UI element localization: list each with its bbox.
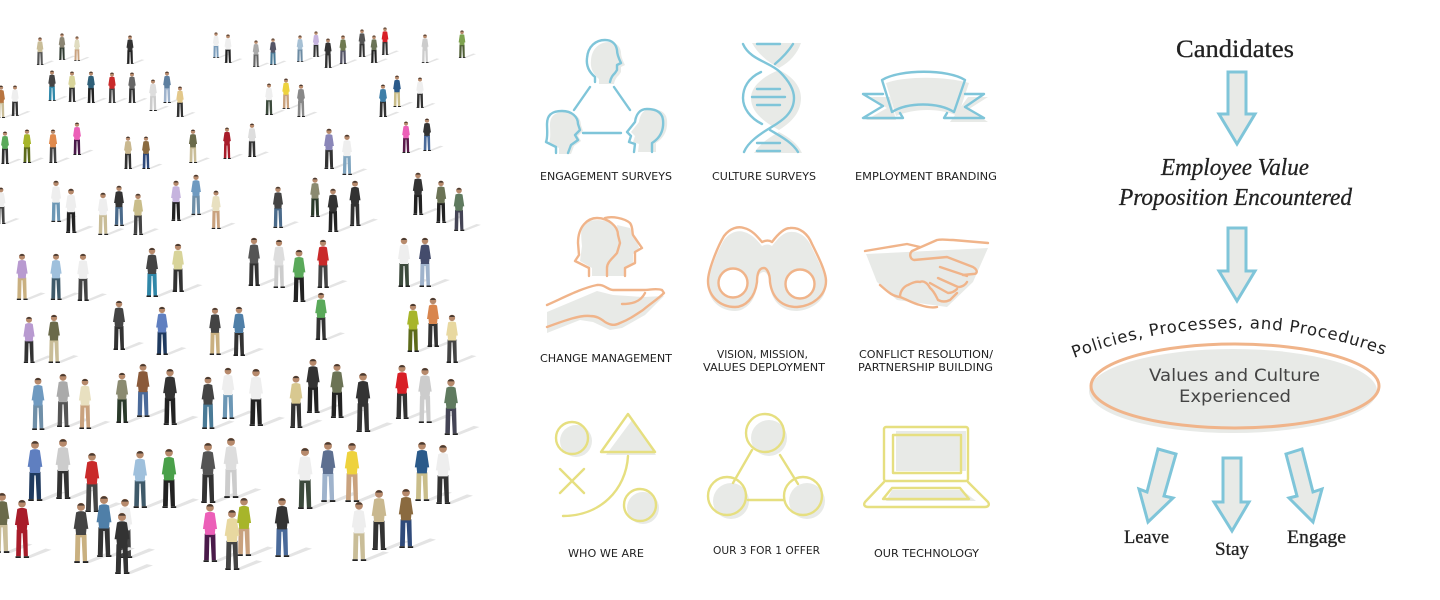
people row 3 xyxy=(1,118,443,175)
people row 5 xyxy=(16,238,450,302)
panel: services icon grid xyxy=(540,40,997,560)
icon: change management xyxy=(547,217,664,333)
icon: our technology laptop xyxy=(864,427,989,507)
heading: employee value proposition encountered: Proposition Encountered xyxy=(1118,185,1353,211)
people row 9 xyxy=(0,489,436,574)
label: conflict resolution / partnership building: CONFLICT RESOLUTION/ xyxy=(859,349,993,361)
ellipse: values and culture experienced: Values and Culture xyxy=(1149,366,1320,386)
label: employment branding: EMPLOYMENT BRANDING xyxy=(855,171,997,183)
panel: candidate journey flow xyxy=(1072,36,1386,560)
label: our 3 for 1 offer: OUR 3 FOR 1 OFFER xyxy=(713,545,820,557)
label: change management: CHANGE MANAGEMENT xyxy=(540,353,673,365)
icon: conflict resolution handshake xyxy=(865,240,988,307)
label: conflict resolution / partnership building xyxy=(858,349,993,374)
label: stay: Stay xyxy=(1215,539,1250,560)
people row 2 xyxy=(0,70,435,118)
label: culture surveys: CULTURE SURVEYS xyxy=(712,171,816,183)
icon: who we are strategy play xyxy=(556,414,659,524)
label: engage: Engage xyxy=(1287,527,1346,548)
label: engagement surveys: ENGAGEMENT SURVEYS xyxy=(540,171,672,183)
arrow: stay xyxy=(1214,458,1249,531)
curved label: policies, processes, and procedures: Policies, Processes, and Procedures xyxy=(1072,318,1386,358)
panel: crowd of people xyxy=(0,27,481,574)
label: vision, mission, values deployment: VALUES DEPLOYMENT xyxy=(703,362,826,374)
heading: candidates: Candidates xyxy=(1176,36,1294,63)
icon: culture surveys dna xyxy=(743,43,802,153)
icon: our 3 for 1 offer xyxy=(708,414,825,519)
arrow: engage xyxy=(1286,449,1322,522)
ellipse: values and culture experienced: Experienced xyxy=(1179,387,1291,407)
label: vision, mission, values deployment: VISION, MISSION, xyxy=(717,349,808,361)
icon: employment branding ribbon xyxy=(863,72,988,122)
label: who we are: WHO WE ARE xyxy=(568,548,644,560)
arrow: value proposition to culture xyxy=(1219,228,1255,301)
heading: employee value proposition encountered xyxy=(1118,155,1353,211)
icon: engagement surveys xyxy=(546,40,667,154)
label: leave: Leave xyxy=(1124,527,1169,548)
people row 1 xyxy=(37,27,476,68)
people row 8 xyxy=(28,438,473,512)
label: vision, mission, values deployment xyxy=(703,349,826,374)
people row 6 xyxy=(23,293,477,363)
people row 4 xyxy=(0,173,481,235)
ellipse: values and culture experienced xyxy=(1089,344,1379,433)
people row 7 xyxy=(32,359,479,435)
label: conflict resolution / partnership building: PARTNERSHIP BUILDING xyxy=(858,362,993,374)
label: our technology: OUR TECHNOLOGY xyxy=(874,548,980,560)
arrow: leave xyxy=(1139,449,1176,522)
icon: vision binoculars xyxy=(708,227,826,311)
arrow: candidates to value proposition xyxy=(1219,72,1255,144)
heading: employee value proposition encountered: Employee Value xyxy=(1160,155,1309,181)
